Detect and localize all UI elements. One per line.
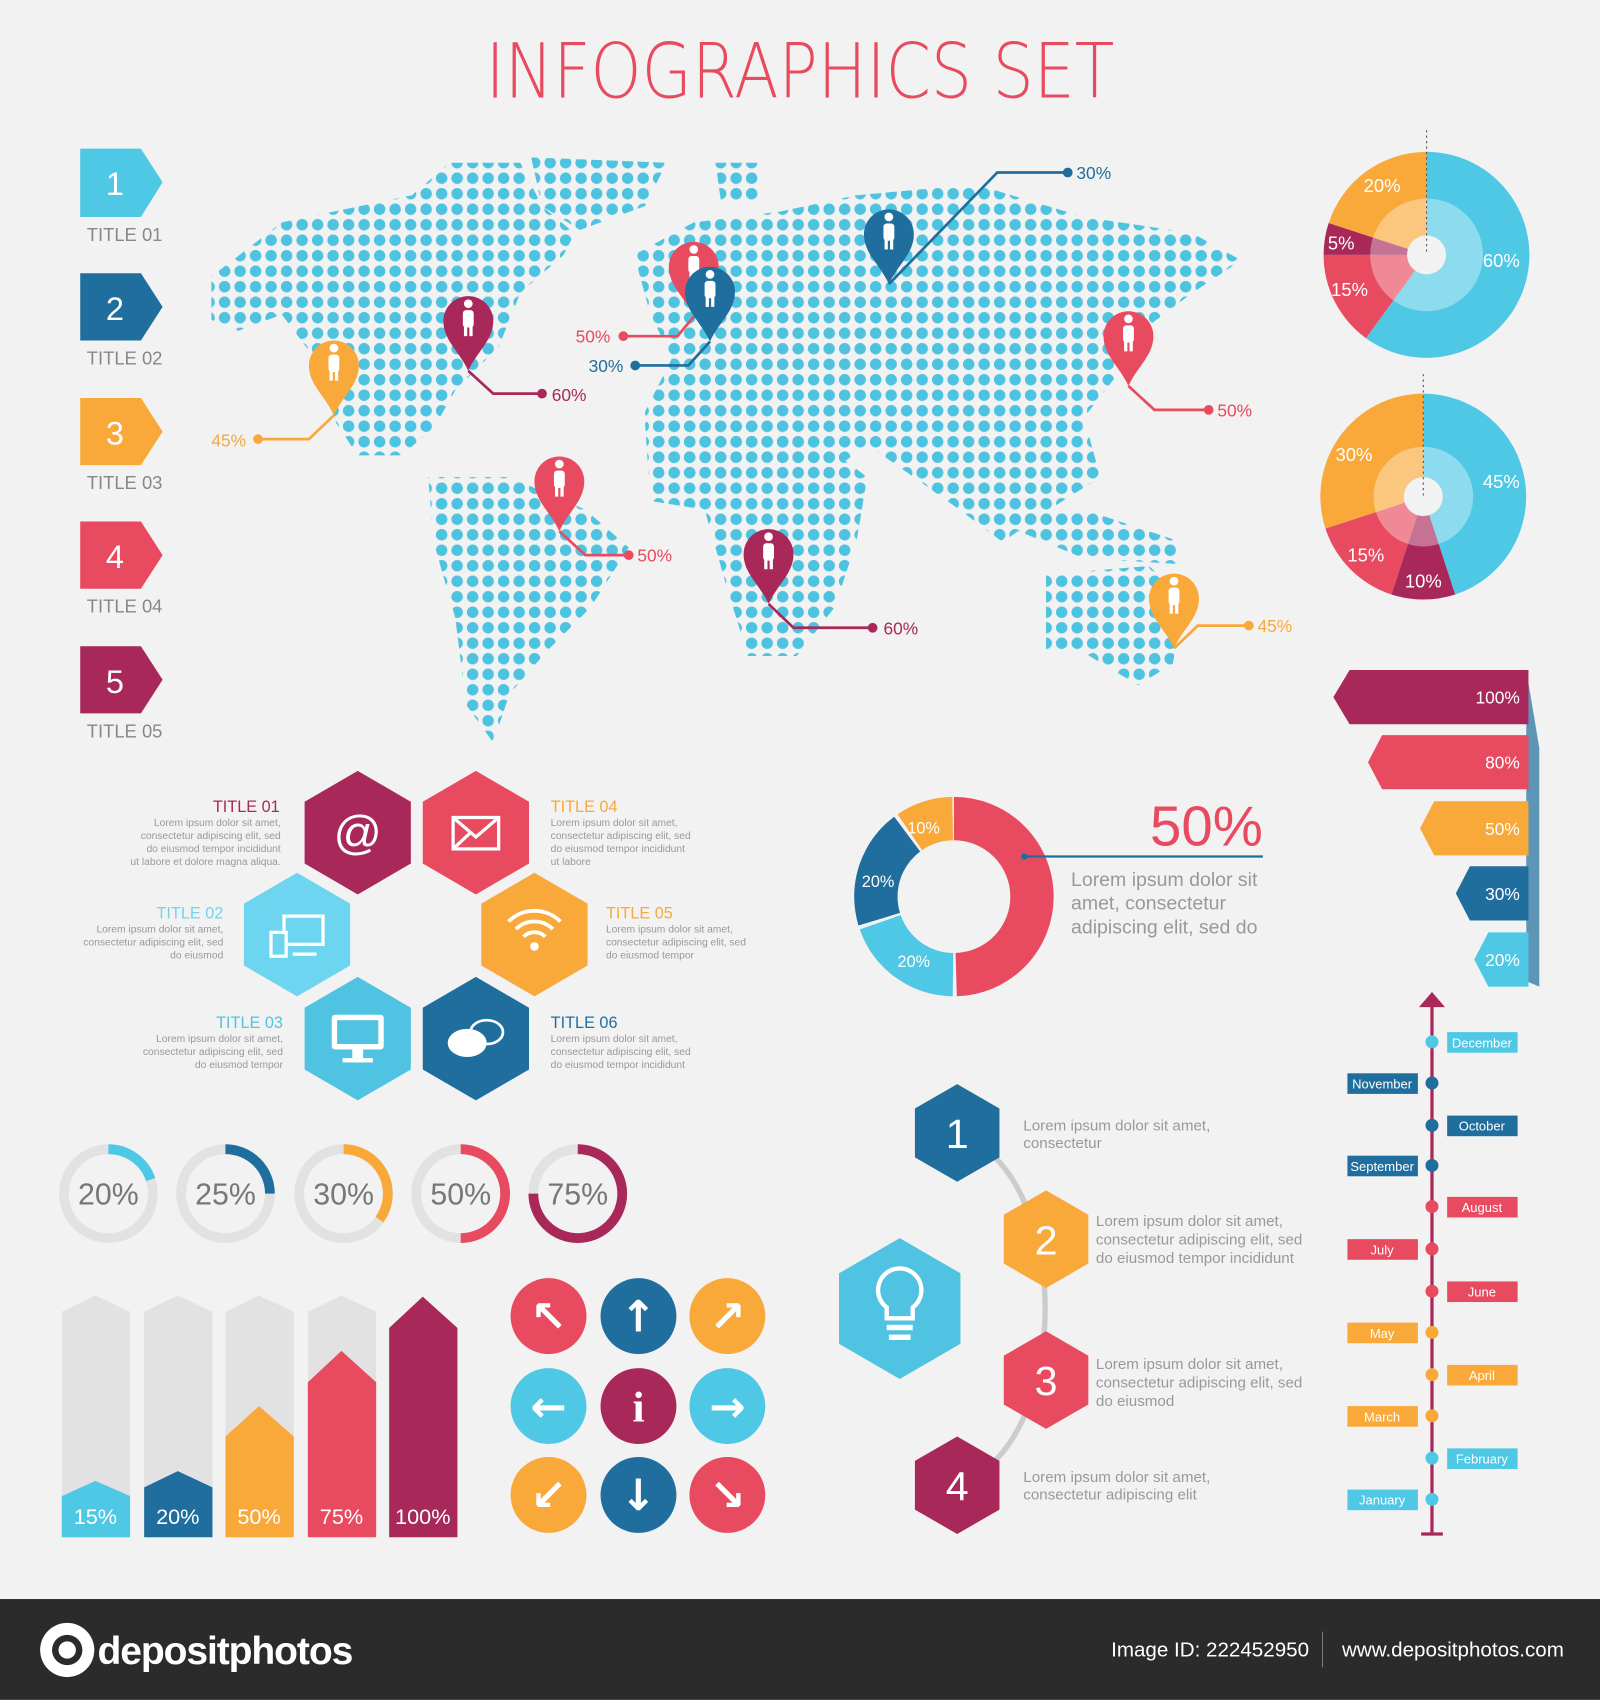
pie chart 1: 20%: [1364, 175, 1401, 196]
numbered steps with lightbulb: consectetur adipiscing elit, sed: [1096, 1375, 1302, 1392]
arrow buttons: ↗: [709, 1292, 746, 1342]
bar chart: 75%: [320, 1504, 363, 1529]
map pins with callouts: [211, 163, 1292, 648]
progress circles: 25%: [195, 1178, 256, 1211]
map pins with callouts: 50%: [637, 546, 672, 566]
numbered steps with lightbulb: Lorem ipsum dolor sit amet,: [1023, 1469, 1210, 1486]
hexagon icon cluster: do eiusmod tempor incididunt: [551, 844, 685, 855]
bar chart: 100%: [395, 1504, 450, 1529]
arrow buttons: [511, 1278, 765, 1533]
ribbon bars: 50%: [1485, 819, 1520, 839]
hexagon icon cluster: consectetur adipiscing elit, sed: [83, 937, 224, 948]
map pins with callouts: 50%: [1217, 400, 1252, 420]
map pins with callouts: 45%: [211, 431, 246, 451]
donut chart 50%: adipiscing elit, sed do: [1071, 916, 1258, 938]
timeline: March: [1364, 1409, 1400, 1424]
hexagon icon cluster: Lorem ipsum dolor sit amet,: [551, 818, 678, 829]
progress circles: 75%: [547, 1178, 608, 1211]
donut chart 50%: 10%: [907, 820, 940, 838]
hexagon icon cluster: Lorem ipsum dolor sit amet,: [96, 924, 223, 935]
arrow buttons: →: [709, 1382, 746, 1432]
numbered tabs: TITLE 02: [87, 347, 162, 368]
hexagon icon cluster: do eiusmod tempor: [606, 950, 695, 961]
hexagon icon cluster: ut labore: [551, 857, 591, 868]
numbered tabs: TITLE 01: [87, 224, 162, 245]
hexagon icon cluster: TITLE 05: [606, 904, 673, 922]
ribbon bars: 100%: [1475, 688, 1520, 708]
donut chart 50%: [862, 795, 1263, 975]
hexagon icon cluster: TITLE 04: [551, 798, 618, 816]
timeline: November: [1352, 1076, 1413, 1091]
hexagon icon cluster: [83, 771, 746, 1100]
map pins with callouts: 45%: [1257, 616, 1292, 636]
donut chart 50%: 20%: [862, 873, 894, 891]
numbered tabs: TITLE 04: [87, 596, 162, 617]
timeline: June: [1468, 1285, 1496, 1300]
hexagon icon cluster: do eiusmod tempor incididunt: [146, 844, 281, 855]
numbered steps with lightbulb: [839, 1084, 1302, 1534]
arrow buttons: i: [632, 1383, 645, 1431]
timeline: January: [1359, 1493, 1406, 1508]
donut chart 50%: amet, consectetur: [1071, 893, 1226, 915]
progress circles: 20%: [78, 1178, 139, 1211]
hexagon icon cluster: TITLE 02: [156, 904, 223, 922]
hexagon icon cluster: consectetur adipiscing elit, sed: [551, 1047, 691, 1058]
timeline: July: [1371, 1242, 1394, 1257]
hexagon icon cluster: do eiusmod: [170, 950, 224, 961]
numbered tabs: 2: [106, 291, 124, 327]
hexagon icon cluster: Lorem ipsum dolor sit amet,: [551, 1034, 678, 1045]
footer bar: [0, 1599, 1600, 1700]
ribbon bars: [1333, 670, 1539, 987]
pie chart 2: 30%: [1336, 444, 1372, 465]
map pins with callouts: 30%: [1076, 163, 1111, 183]
numbered tabs: [80, 149, 163, 741]
numbered tabs: TITLE 05: [87, 720, 162, 741]
numbered steps with lightbulb: do eiusmod tempor incididunt: [1096, 1250, 1295, 1267]
timeline: September: [1350, 1159, 1415, 1174]
hexagon icon cluster: consectetur adipiscing elit, sed: [143, 1047, 283, 1058]
arrow buttons: ↖: [530, 1292, 567, 1342]
hexagon icon cluster: consectetur adipiscing elit, sed: [551, 831, 691, 842]
hexagon icon cluster: @: [334, 807, 382, 860]
hexagon icon cluster: consectetur adipiscing elit, sed: [141, 831, 281, 842]
arrow buttons: ↙: [530, 1471, 567, 1521]
map pins with callouts: 60%: [552, 385, 586, 405]
numbered steps with lightbulb: Lorem ipsum dolor sit amet,: [1023, 1118, 1210, 1135]
arrow buttons: ←: [530, 1382, 567, 1432]
donut chart 50%: 20%: [898, 953, 930, 971]
footer bar: depositphotos: [98, 1630, 353, 1673]
timeline: December: [1452, 1035, 1512, 1050]
donut chart 50%: 50%: [1150, 795, 1263, 858]
numbered steps with lightbulb: consectetur adipiscing elit: [1023, 1486, 1198, 1503]
map pins with callouts: 50%: [576, 327, 610, 347]
hexagon icon cluster: TITLE 06: [551, 1014, 618, 1032]
pie chart 2: 10%: [1405, 571, 1442, 592]
pie chart 1: [1324, 130, 1529, 358]
timeline: February: [1456, 1452, 1508, 1467]
numbered tabs: 1: [106, 166, 124, 202]
numbered steps with lightbulb: Lorem ipsum dolor sit amet,: [1096, 1213, 1283, 1230]
numbered steps with lightbulb: consectetur adipiscing elit, sed: [1096, 1232, 1302, 1249]
timeline: May: [1370, 1326, 1395, 1341]
arrow buttons: ↘: [709, 1471, 746, 1521]
progress circles: 50%: [430, 1178, 491, 1211]
numbered tabs: 3: [106, 416, 124, 452]
numbered tabs: 4: [106, 539, 124, 575]
pie chart 2: [1320, 374, 1526, 600]
timeline: August: [1462, 1200, 1502, 1215]
hexagon icon cluster: consectetur adipiscing elit, sed: [606, 937, 746, 948]
hexagon icon cluster: Lorem ipsum dolor sit amet,: [156, 1034, 283, 1045]
numbered tabs: TITLE 03: [87, 472, 162, 493]
hexagon icon cluster: TITLE 03: [216, 1014, 283, 1032]
progress circles: [64, 1149, 622, 1238]
world map: [211, 157, 1241, 743]
numbered steps with lightbulb: do eiusmod: [1096, 1393, 1174, 1410]
numbered steps with lightbulb: 4: [946, 1463, 969, 1509]
hexagon icon cluster: do eiusmod tempor incididunt: [551, 1060, 685, 1071]
numbered steps with lightbulb: Lorem ipsum dolor sit amet,: [1096, 1356, 1283, 1373]
ribbon bars: 80%: [1485, 753, 1520, 773]
map pins with callouts: 30%: [589, 356, 623, 376]
bar chart: [62, 1296, 457, 1537]
numbered steps with lightbulb: consectetur: [1023, 1135, 1102, 1152]
timeline: October: [1459, 1119, 1506, 1134]
numbered steps with lightbulb: 2: [1035, 1217, 1058, 1263]
bar chart: 50%: [237, 1504, 281, 1529]
numbered steps with lightbulb: 3: [1035, 1358, 1058, 1404]
hexagon icon cluster: TITLE 01: [213, 798, 280, 816]
bar chart: 20%: [156, 1504, 199, 1529]
hexagon icon cluster: Lorem ipsum dolor sit amet,: [606, 924, 733, 935]
hexagon icon cluster: ut labore et dolore magna aliqua.: [130, 857, 281, 868]
timeline: [1347, 992, 1518, 1534]
pie chart 2: 15%: [1347, 545, 1384, 566]
pie chart 1: 60%: [1483, 250, 1520, 271]
footer bar: Image ID: 222452950: [1111, 1639, 1309, 1662]
ribbon bars: 30%: [1485, 884, 1520, 904]
bar chart: 15%: [74, 1504, 117, 1529]
hexagon icon cluster: do eiusmod tempor: [195, 1060, 283, 1071]
numbered steps with lightbulb: 1: [946, 1111, 969, 1157]
progress circles: 30%: [313, 1178, 374, 1211]
timeline: April: [1469, 1368, 1495, 1383]
footer bar: www.depositphotos.com: [1341, 1639, 1564, 1662]
numbered tabs: 5: [106, 664, 124, 700]
pie chart 2: 45%: [1483, 471, 1520, 492]
pie chart 1: 5%: [1328, 232, 1355, 253]
arrow buttons: ↑: [620, 1292, 657, 1342]
donut chart 50%: Lorem ipsum dolor sit: [1071, 869, 1258, 891]
map pins with callouts: 60%: [883, 618, 918, 638]
ribbon bars: 20%: [1485, 950, 1520, 970]
arrow buttons: ↓: [620, 1471, 657, 1521]
pie chart 1: 15%: [1331, 279, 1368, 300]
hexagon icon cluster: Lorem ipsum dolor sit amet,: [154, 818, 281, 829]
title: INFOGRAPHICS SET: [486, 28, 1114, 116]
